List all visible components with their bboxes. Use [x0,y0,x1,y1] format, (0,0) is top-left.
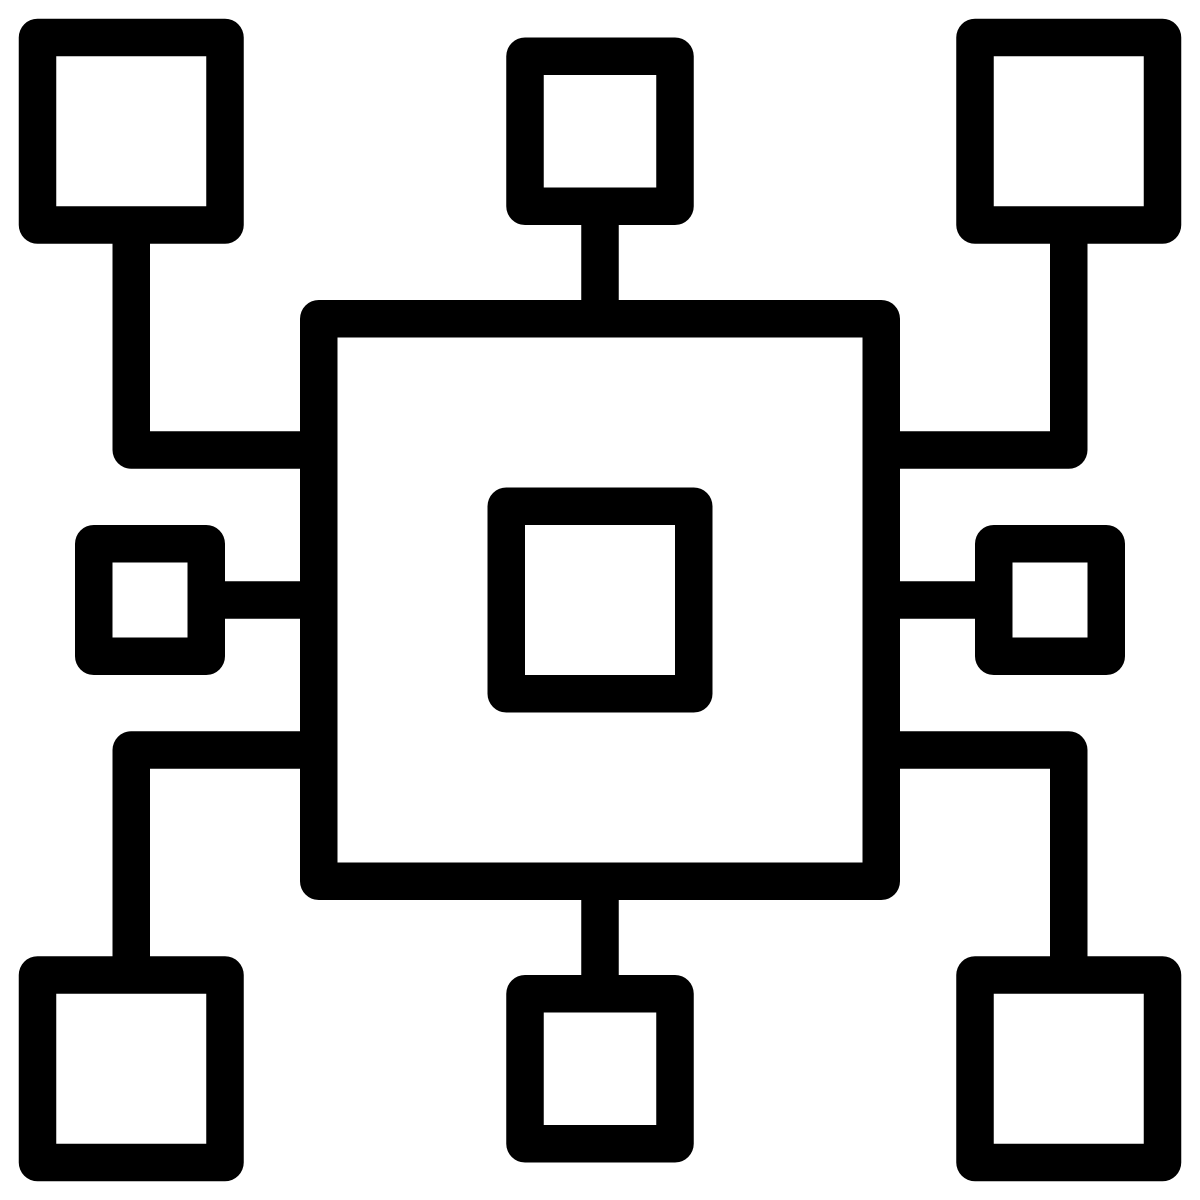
central hub square [319,319,881,881]
node: top left [38,38,225,225]
connector: bottom right [881,750,1069,975]
inner core square [506,506,694,694]
node: top center [525,56,675,206]
node: bottom left [38,975,225,1162]
connector: bottom left [131,750,319,975]
node: bottom center [525,994,675,1144]
connector: top right [881,225,1069,450]
node: middle right [994,544,1106,656]
connector: bottom center [581,881,619,994]
connector: middle left [206,581,319,619]
connector: top center [581,206,619,319]
node: bottom right [975,975,1162,1162]
connector: top left [131,225,319,450]
node: top right [975,38,1162,225]
node: middle left [94,544,206,656]
connector: middle right [881,581,994,619]
